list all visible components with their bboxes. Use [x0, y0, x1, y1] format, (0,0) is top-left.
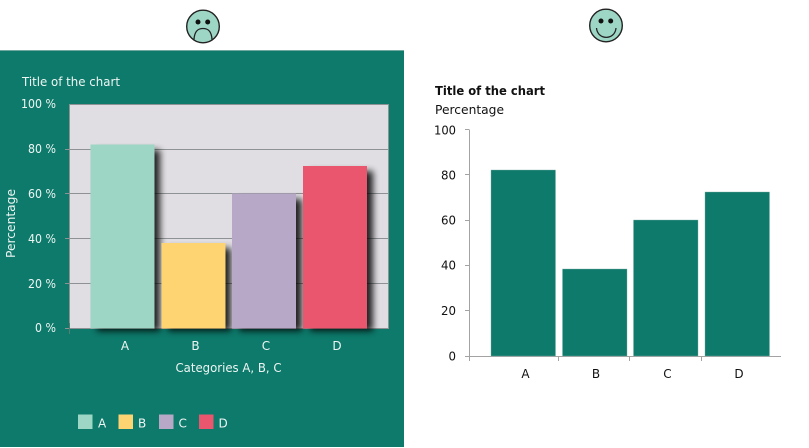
category labels: B	[191, 339, 200, 353]
legend	[78, 414, 228, 430]
chart title: Title of the chart	[21, 75, 120, 89]
legend: D	[218, 416, 228, 430]
x axis title: Categories A, B, C	[176, 361, 282, 375]
unit label: Percentage	[435, 103, 504, 117]
category labels: B	[592, 367, 600, 381]
y axis labels with percent: 80 %	[28, 142, 56, 156]
category labels: C	[262, 339, 270, 353]
y axis labels: 40	[441, 258, 456, 272]
category labels: D	[734, 367, 744, 381]
legend: C	[178, 416, 187, 430]
bar A	[491, 170, 556, 356]
bar D	[303, 166, 367, 328]
y axis labels with percent: 60 %	[28, 187, 56, 201]
bar C	[232, 194, 296, 328]
y axis labels with percent	[21, 97, 56, 335]
category labels: A	[121, 339, 130, 353]
bar C	[634, 220, 698, 356]
gridlines	[65, 150, 388, 334]
axes	[465, 130, 781, 361]
legend: B	[138, 416, 146, 430]
bar B	[562, 269, 627, 356]
y axis labels: 20	[441, 303, 456, 318]
legend: A	[98, 416, 107, 430]
category labels	[521, 367, 744, 381]
y axis labels with percent: 40 %	[28, 232, 56, 246]
category labels: A	[521, 367, 530, 381]
panel: good chart example	[434, 84, 781, 381]
y axis labels: 80	[441, 168, 456, 182]
y axis labels with percent: 20 %	[28, 277, 56, 291]
chart title bold: Title of the chart	[435, 84, 545, 98]
category labels	[121, 339, 342, 353]
y axis title: Percentage	[4, 189, 18, 258]
panel: bad chart example	[0, 50, 404, 447]
plot background	[70, 104, 388, 328]
y axis labels with percent: 100 %	[21, 97, 56, 111]
bar A	[90, 144, 154, 328]
bar shadows	[97, 150, 373, 331]
y axis labels: 60	[441, 212, 456, 228]
icon: sad face	[187, 10, 219, 43]
bar B	[162, 243, 226, 328]
icon: happy face	[590, 9, 622, 42]
y axis labels: 0	[448, 348, 456, 364]
y axis labels	[434, 122, 456, 364]
category labels: D	[332, 339, 342, 353]
y axis labels: 100	[434, 122, 456, 138]
y axis labels with percent: 0 %	[35, 321, 56, 335]
bar D	[705, 192, 770, 356]
category labels: C	[663, 367, 672, 381]
